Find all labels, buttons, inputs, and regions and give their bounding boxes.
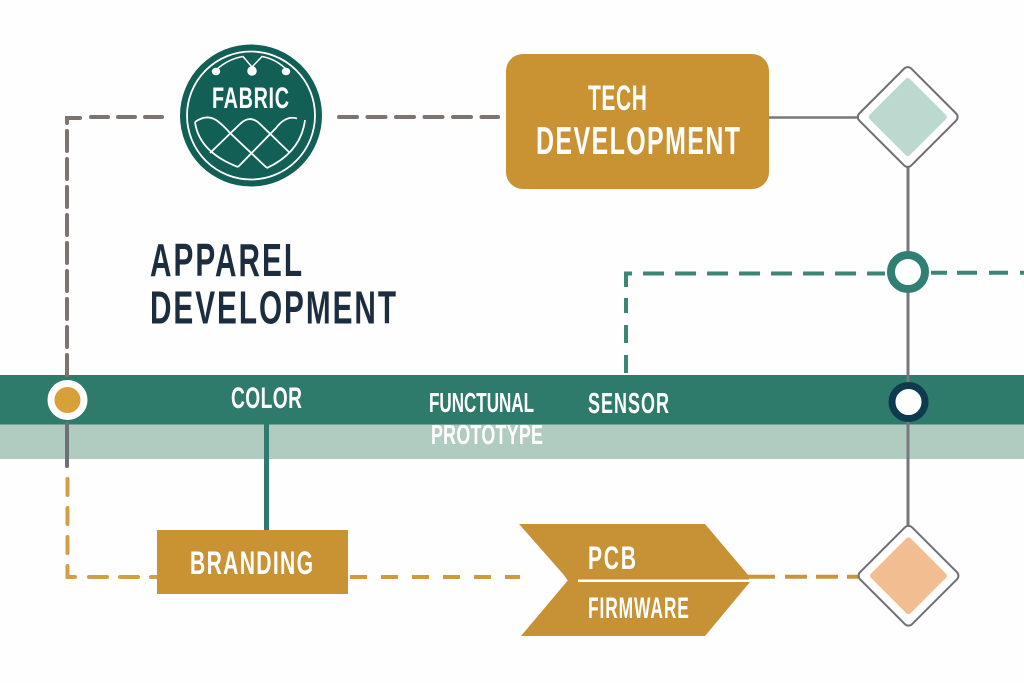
chevron: pcb and firmware bbox=[519, 524, 750, 636]
label: functional prototype: PROTOTYPE bbox=[431, 419, 543, 450]
icon: gold node bbox=[51, 384, 84, 416]
band: timeline bar bbox=[0, 375, 1024, 459]
connector: grey vertical spine bbox=[906, 165, 910, 526]
label: sensor: SENSOR bbox=[588, 388, 669, 420]
connector: teal line color to branding bbox=[264, 424, 269, 530]
pcb label: PCB bbox=[588, 539, 636, 576]
connector: grey line under left node bbox=[65, 424, 69, 466]
tech label: TECH bbox=[588, 80, 647, 118]
connector: grey line tech to diamond bbox=[769, 116, 858, 119]
icon: fabric badge bbox=[180, 44, 322, 186]
label: functional prototype: FUNCTUNAL bbox=[429, 387, 534, 418]
icon: top diamond bbox=[856, 65, 960, 169]
box: branding bbox=[157, 530, 348, 594]
fabric label: FABRIC bbox=[212, 82, 289, 115]
circuit motif bbox=[212, 56, 290, 75]
title: DEVELOPMENT bbox=[150, 283, 396, 334]
title: APPAREL bbox=[150, 236, 302, 287]
label: functional prototype bbox=[429, 387, 543, 450]
connector: gold dashed branding link bbox=[68, 479, 157, 577]
connector: gold dashed chevron to diamond bbox=[745, 575, 858, 579]
development label: DEVELOPMENT bbox=[536, 118, 740, 162]
firmware label: FIRMWARE bbox=[588, 592, 689, 625]
woven wave motif bbox=[195, 117, 305, 168]
branding label: BRANDING bbox=[190, 544, 313, 581]
box: tech development bbox=[506, 54, 769, 189]
icon: teal node bbox=[891, 255, 925, 289]
icon: navy node bbox=[892, 386, 925, 418]
icon: bottom diamond bbox=[857, 524, 960, 628]
connector: gold dashed branding to chevron bbox=[350, 575, 520, 579]
label: color: COLOR bbox=[231, 382, 302, 415]
connector: grey dashed fabric link bbox=[67, 117, 498, 375]
connector: teal dashed sensor link bbox=[626, 273, 1024, 373]
title bbox=[150, 236, 396, 334]
